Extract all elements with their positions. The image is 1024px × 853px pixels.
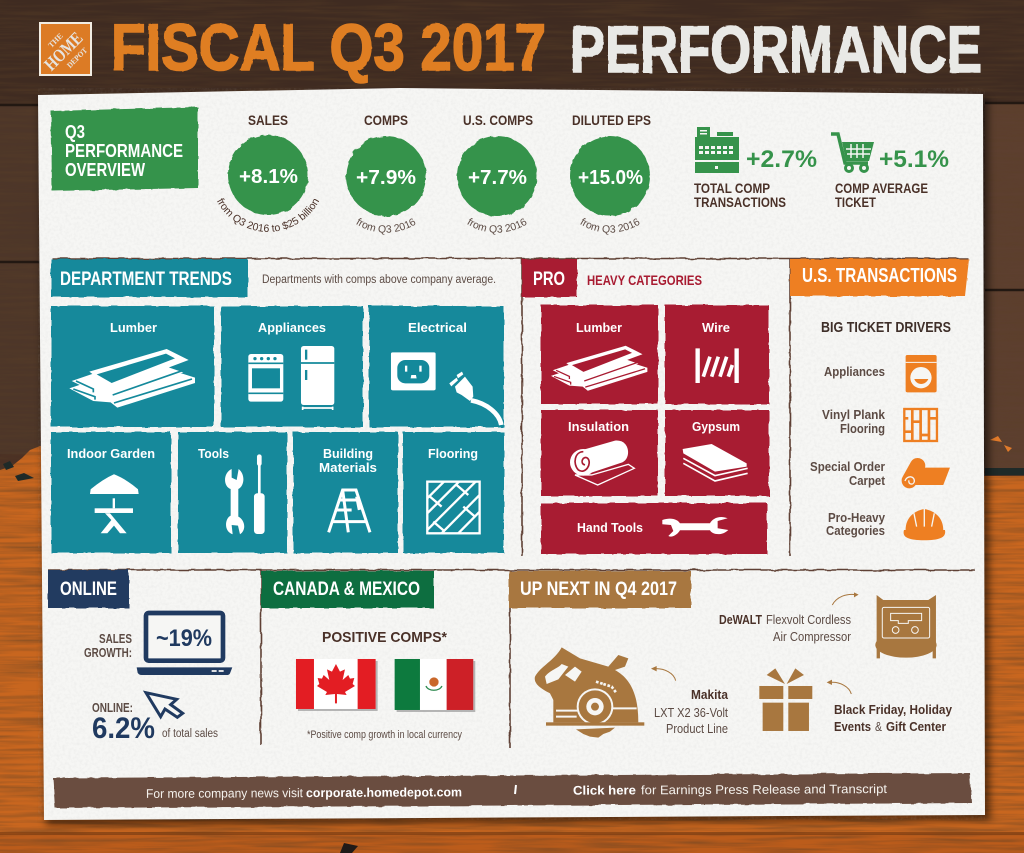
flag: Mexico	[395, 659, 475, 712]
metric: total comp transactions	[694, 127, 817, 210]
icon: shopping cart	[831, 134, 874, 172]
metric: comps: COMPS	[364, 113, 408, 128]
positive comp note: *Positive comp growth in local currency	[307, 729, 462, 741]
paper shadow	[40, 98, 990, 825]
tile: gypsum: Gypsum	[692, 419, 740, 434]
item: Black Friday gift center: &	[875, 720, 883, 734]
panel: department trends	[51, 259, 504, 553]
metric: US comps: from Q3 2016	[467, 218, 526, 235]
metric: diluted EPS: +15.0%	[578, 167, 643, 189]
driver: vinyl plank flooring: Flooring	[840, 422, 885, 436]
item: Makita saw: Makita	[691, 688, 729, 702]
overview heading	[51, 107, 198, 191]
panel: pro heavy categories	[522, 259, 769, 554]
driver: pro-heavy categories	[826, 509, 945, 540]
metric: US comps	[456, 113, 538, 235]
title: FISCAL Q3 2017	[111, 10, 546, 84]
driver: pro-heavy categories: Categories	[826, 524, 885, 538]
footer bar: For more company news visit	[146, 786, 304, 801]
metric: sales: from Q3 2016 to $25 billion	[217, 198, 320, 232]
tile: gypsum	[683, 419, 748, 481]
icon: Home Depot logo: THE	[46, 31, 65, 50]
online share stat	[92, 701, 218, 745]
online heading: ONLINE	[60, 579, 117, 600]
tile: lumber: Lumber	[110, 320, 157, 335]
overview heading: OVERVIEW	[65, 159, 145, 180]
online share stat: of total sales	[162, 728, 218, 740]
tile: flooring	[427, 446, 480, 533]
sales growth label: SALES	[99, 632, 132, 646]
metric: comp average ticket: COMP AVERAGE	[835, 181, 928, 196]
big ticket drivers heading: BIG TICKET DRIVERS	[821, 319, 951, 336]
driver: special order carpet: Special Order	[810, 460, 885, 474]
panel: up next in Q4 2017	[509, 571, 952, 738]
metric: comps	[345, 113, 426, 235]
item: Makita saw	[535, 647, 729, 738]
Canada Mexico heading: CANADA & MEXICO	[273, 579, 420, 600]
footer bar: for Earnings Press Release and Transcript	[641, 782, 888, 797]
overview heading: PERFORMANCE	[65, 140, 183, 161]
item: Black Friday gift center	[759, 668, 952, 734]
metric: comps: from Q3 2016	[356, 218, 416, 235]
icon: circular saw	[535, 647, 644, 738]
up next heading: UP NEXT IN Q4 2017	[520, 579, 677, 600]
item: Black Friday gift center: Gift Center	[886, 720, 946, 734]
tile: electrical: Electrical	[408, 320, 467, 335]
tile: indoor garden: Indoor Garden	[67, 446, 155, 461]
item: DeWALT compressor: Air Compressor	[773, 630, 851, 644]
arrow: to saw	[651, 666, 676, 681]
item: Makita saw: Product Line	[666, 722, 728, 736]
metric: sales: +8.1%	[239, 166, 298, 188]
pro heading: PRO	[533, 269, 565, 290]
driver: appliances: Appliances	[824, 365, 885, 379]
department tiles background	[51, 306, 504, 553]
tile: tools: Tools	[198, 446, 229, 461]
metric: comps: +7.9%	[356, 167, 416, 189]
Canada Mexico heading	[261, 571, 434, 608]
department trends heading	[51, 259, 248, 297]
footer bar: corporate.homedepot.com	[306, 785, 462, 800]
tile: hand tools: Hand Tools	[577, 520, 643, 535]
U.S. transactions heading	[790, 259, 969, 296]
driver: special order carpet	[810, 460, 950, 488]
driver: special order carpet: Carpet	[849, 474, 886, 488]
tile: pro lumber	[551, 320, 647, 391]
driver: pro-heavy categories: Pro-Heavy	[828, 511, 885, 525]
item: Makita saw: LXT X2 36-Volt	[654, 706, 728, 720]
item: Black Friday gift center: Events	[834, 720, 871, 734]
driver: appliances	[824, 355, 937, 392]
tile: insulation	[568, 419, 634, 485]
arrow: to compressor	[832, 592, 859, 605]
title	[111, 10, 982, 86]
metric: diluted EPS	[570, 113, 651, 235]
tile: appliances: Appliances	[258, 320, 326, 335]
pro heading: HEAVY CATEGORIES	[587, 272, 702, 288]
pro heading	[522, 259, 702, 297]
tile: appliances	[248, 320, 334, 410]
up next heading	[509, 571, 691, 608]
tile: indoor garden	[67, 446, 155, 533]
sales growth label: GROWTH:	[84, 646, 132, 660]
tile: building materials	[319, 446, 377, 532]
icon: cursor arrow	[146, 693, 183, 717]
icon: Home Depot logo: DEPOT	[65, 45, 90, 70]
U.S. transactions heading: U.S. TRANSACTIONS	[802, 265, 957, 287]
metric: comp average ticket: TICKET	[835, 195, 877, 210]
icon: laptop: ~19%	[156, 625, 212, 652]
tile: building materials: Building	[323, 446, 373, 461]
panel: online	[48, 570, 232, 745]
arrow: to gift	[827, 680, 851, 694]
tile: pro lumber: Lumber	[576, 320, 622, 335]
sales growth label	[84, 632, 132, 660]
item: DeWALT compressor: Flexvolt Cordless	[766, 613, 851, 627]
department trends heading: DEPARTMENT TRENDS	[60, 269, 232, 290]
panel: Canada and Mexico	[261, 571, 475, 741]
online share stat: 6.2%	[92, 712, 155, 745]
online heading	[48, 570, 129, 608]
item: DeWALT compressor: DeWALT	[719, 613, 762, 627]
panel: Q3 performance overview	[50, 106, 949, 235]
metric: sales	[217, 113, 320, 232]
metric: diluted EPS: from Q3 2016	[580, 218, 640, 235]
tile: electrical	[391, 320, 501, 425]
tile: hand tools	[577, 517, 728, 537]
panel: U.S. transactions	[790, 259, 969, 540]
footer bar: Click here	[573, 783, 636, 798]
metric: US comps: U.S. COMPS	[463, 113, 533, 128]
tile: wire: Wire	[702, 320, 730, 335]
icon: gift box	[759, 668, 812, 731]
overview heading: Q3	[65, 121, 85, 142]
online share stat: ONLINE:	[92, 701, 133, 715]
metric: total comp transactions: TRANSACTIONS	[694, 195, 786, 210]
metric: US comps: +7.7%	[468, 167, 527, 189]
metric: comp average ticket: +5.1%	[879, 146, 949, 173]
pro tiles background	[541, 305, 769, 554]
icon: air compressor	[875, 595, 937, 658]
icon: laptop	[137, 613, 232, 675]
metric: total comp transactions: +2.7%	[746, 146, 817, 173]
icon: cash register	[695, 127, 739, 173]
footer bar	[53, 773, 972, 808]
metric: total comp transactions: TOTAL COMP	[694, 181, 770, 196]
paper panel	[38, 88, 985, 820]
tile: building materials: Materials	[319, 460, 377, 475]
metric: comp average ticket	[831, 134, 949, 210]
tile: flooring: Flooring	[428, 446, 478, 461]
metric: sales: SALES	[248, 113, 288, 128]
tile: insulation: Insulation	[568, 419, 629, 434]
item: DeWALT compressor	[719, 592, 937, 658]
icon: Home Depot logo: HOME	[40, 28, 87, 74]
metric: diluted EPS: DILUTED EPS	[572, 113, 651, 128]
departments note: Departments with comps above company average.	[262, 274, 496, 286]
positive comps heading: POSITIVE COMPS*	[322, 629, 447, 646]
section divider lines	[48, 258, 975, 748]
driver: vinyl plank flooring: Vinyl Plank	[822, 408, 885, 422]
flag: Canada	[296, 659, 378, 711]
tile: wire	[698, 320, 737, 383]
tile: tools	[198, 446, 265, 534]
tile: lumber	[69, 320, 195, 408]
item: Black Friday gift center: Black Friday, Holiday	[834, 703, 952, 717]
driver: vinyl plank flooring	[822, 408, 937, 441]
